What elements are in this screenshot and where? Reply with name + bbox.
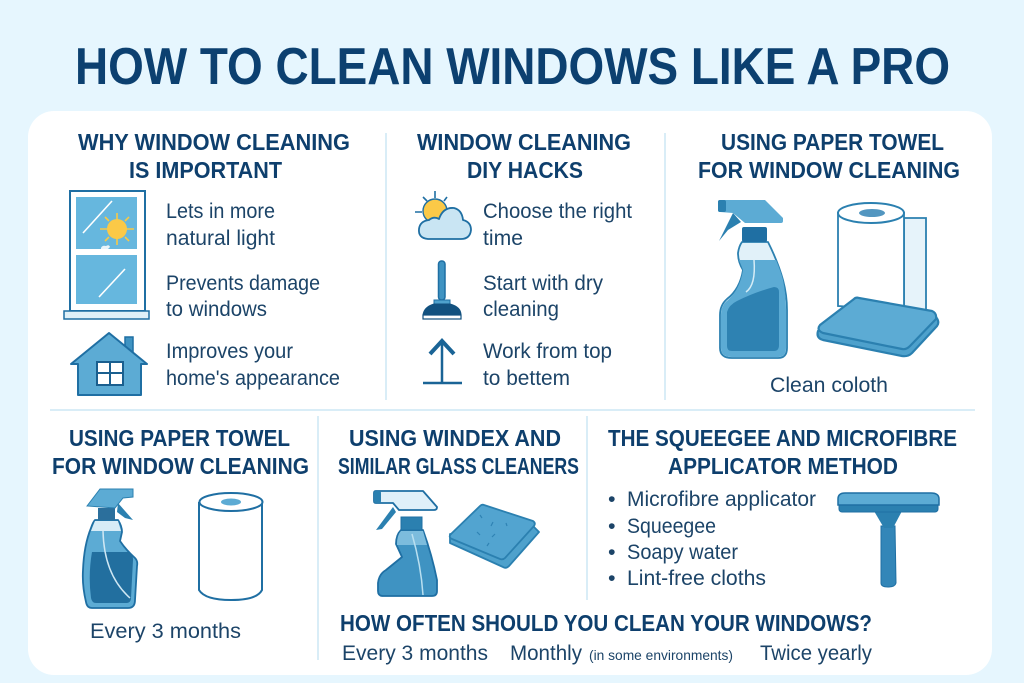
bullet list: Lint-free cloths bbox=[627, 566, 766, 590]
bullet list: • bbox=[608, 514, 616, 538]
panel: using windex bbox=[338, 425, 579, 596]
heading: diy hacks: DIY HACKS bbox=[467, 157, 583, 183]
icon: up arrow bbox=[423, 340, 462, 383]
heading: using paper towel: USING PAPER TOWEL bbox=[69, 425, 290, 451]
icon: sun and cloud bbox=[415, 191, 471, 239]
heading: how often: HOW OFTEN SHOULD YOU CLEAN YOUR WINDOWS? bbox=[340, 610, 872, 636]
bullet list: Microfibre applicator bbox=[627, 487, 816, 511]
heading: using paper towel: USING PAPER TOWEL bbox=[721, 129, 944, 155]
text: start with dry cleaning: cleaning bbox=[483, 297, 559, 321]
text: choose the right time: time bbox=[483, 226, 523, 250]
main white panel bbox=[28, 111, 992, 675]
panel: why window cleaning is important bbox=[64, 129, 350, 395]
heading: using windex: SIMILAR GLASS CLEANERS bbox=[338, 453, 579, 479]
heading: using windex: USING WINDEX AND bbox=[349, 425, 561, 451]
frequency options: Twice yearly bbox=[760, 641, 872, 665]
heading: squeegee method: APPLICATOR METHOD bbox=[668, 453, 898, 479]
bullet list bbox=[608, 487, 816, 590]
heading: why window cleaning bbox=[78, 129, 350, 183]
frequency options: Every 3 months bbox=[342, 641, 488, 665]
text: start with dry cleaning: Start with dry bbox=[483, 271, 603, 295]
bullet list: • bbox=[608, 566, 616, 590]
text: improves appearance bbox=[166, 339, 340, 390]
heading: diy hacks: WINDOW CLEANING bbox=[417, 129, 631, 155]
heading: using paper towel: FOR WINDOW CLEANING bbox=[698, 157, 960, 183]
icon: folded cloth bbox=[450, 505, 539, 568]
icon: spray bottle bbox=[374, 491, 437, 596]
heading: why window cleaning: WHY WINDOW CLEANING bbox=[78, 129, 350, 155]
icon: plunger bbox=[423, 261, 461, 319]
frequency options bbox=[342, 641, 872, 665]
icon: spray bottle bbox=[83, 489, 137, 608]
heading: squeegee method: THE SQUEEGEE AND MICROFIBRE bbox=[608, 425, 957, 451]
bullet list: • bbox=[608, 487, 616, 511]
panel: squeegee and microfibre bbox=[608, 425, 957, 590]
text: choose the right time: Choose the right bbox=[483, 199, 632, 223]
text: start with dry cleaning bbox=[483, 271, 603, 321]
icon: window with sun bbox=[64, 191, 149, 319]
text: work from top: to bettem bbox=[483, 366, 570, 390]
icon: house bbox=[71, 333, 147, 395]
text: choose the right time bbox=[483, 199, 632, 250]
bullet list: Squeegee bbox=[627, 514, 716, 538]
text: improves appearance: home's appearance bbox=[166, 366, 340, 390]
text: improves appearance: Improves your bbox=[166, 339, 293, 363]
panel: diy hacks bbox=[415, 129, 632, 390]
heading: using paper towel bbox=[52, 425, 309, 479]
panel: using paper towel bottom left bbox=[52, 425, 309, 643]
heading: squeegee method bbox=[608, 425, 957, 479]
icon: folded cloths bbox=[818, 298, 938, 356]
bullet list: • bbox=[608, 540, 616, 564]
panel: how often bbox=[340, 610, 872, 665]
text: lets in more natural light bbox=[166, 199, 275, 250]
icon: squeegee bbox=[838, 493, 939, 587]
bullet list: Soapy water bbox=[627, 540, 738, 564]
frequency options: (in some environments) bbox=[589, 647, 733, 663]
heading: using windex bbox=[338, 425, 579, 479]
icon: paper towel roll bbox=[199, 493, 262, 600]
text: prevents damage: Prevents damage bbox=[166, 271, 320, 295]
text: every 3 months: Every 3 months bbox=[90, 619, 241, 643]
heading: why window cleaning: IS IMPORTANT bbox=[129, 157, 282, 183]
text: prevents damage bbox=[166, 271, 320, 321]
text: work from top: Work from top bbox=[483, 339, 612, 363]
frequency options: Monthly bbox=[510, 641, 582, 665]
text: lets in more natural light: Lets in more bbox=[166, 199, 275, 223]
heading: using paper towel bbox=[698, 129, 960, 183]
icon: paper towel roll bbox=[838, 203, 926, 310]
heading: diy hacks bbox=[417, 129, 631, 183]
text: prevents damage: to windows bbox=[166, 297, 267, 321]
panel: using paper towel top right bbox=[698, 129, 960, 397]
text: clean coloth: Clean coloth bbox=[770, 373, 888, 397]
icon: spray bottle bbox=[718, 200, 787, 358]
heading: using paper towel: FOR WINDOW CLEANING bbox=[52, 453, 309, 479]
text: work from top bbox=[483, 339, 612, 390]
text: lets in more natural light: natural light bbox=[166, 226, 275, 250]
